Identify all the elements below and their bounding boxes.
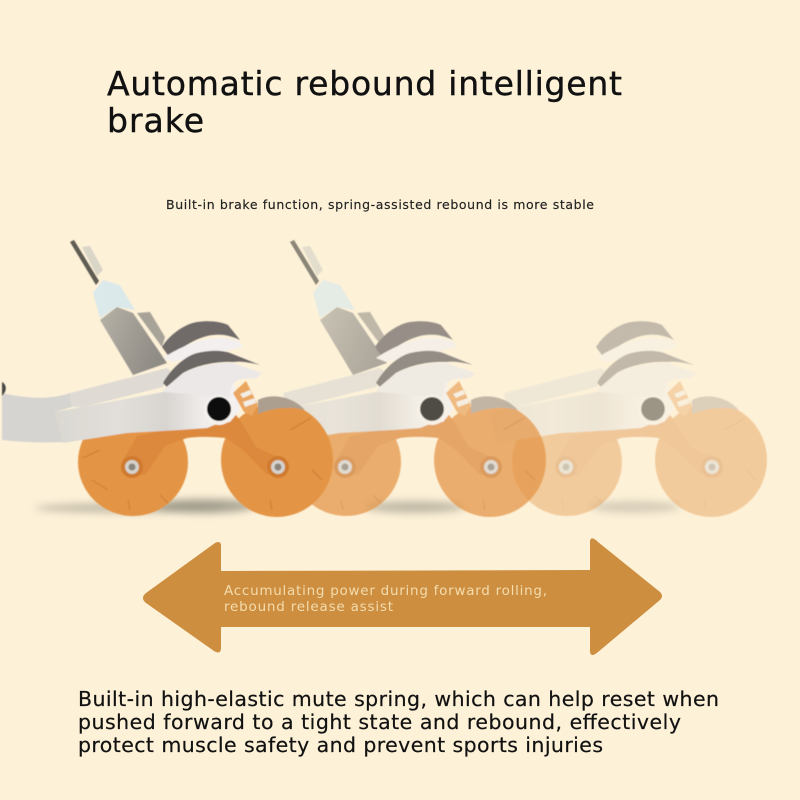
roller stage 3: faintest, no handle xyxy=(489,321,767,517)
subtitle: Built-in brake function, spring-assisted rebound is more stable xyxy=(166,197,594,212)
title: Automatic rebound intelligent xyxy=(107,64,622,103)
ground shadows xyxy=(35,499,680,513)
double-headed arrow callout xyxy=(143,538,662,655)
title: brake xyxy=(107,101,204,140)
arrow label: rebound release assist xyxy=(224,599,393,615)
body description: pushed forward to a tight state and rebound, effectively xyxy=(78,710,681,734)
arrow label: Accumulating power during forward rolling, xyxy=(224,583,547,599)
roller stage 2: medium xyxy=(268,240,546,517)
rear tail at left edge xyxy=(2,393,72,442)
body description: Built-in high-elastic mute spring, which can help reset when xyxy=(78,687,719,711)
product illustration: three motion stages of the ab roller xyxy=(2,240,767,517)
body description: protect muscle safety and prevent sports injuries xyxy=(78,733,603,757)
roller stage 1: solid xyxy=(2,240,333,517)
